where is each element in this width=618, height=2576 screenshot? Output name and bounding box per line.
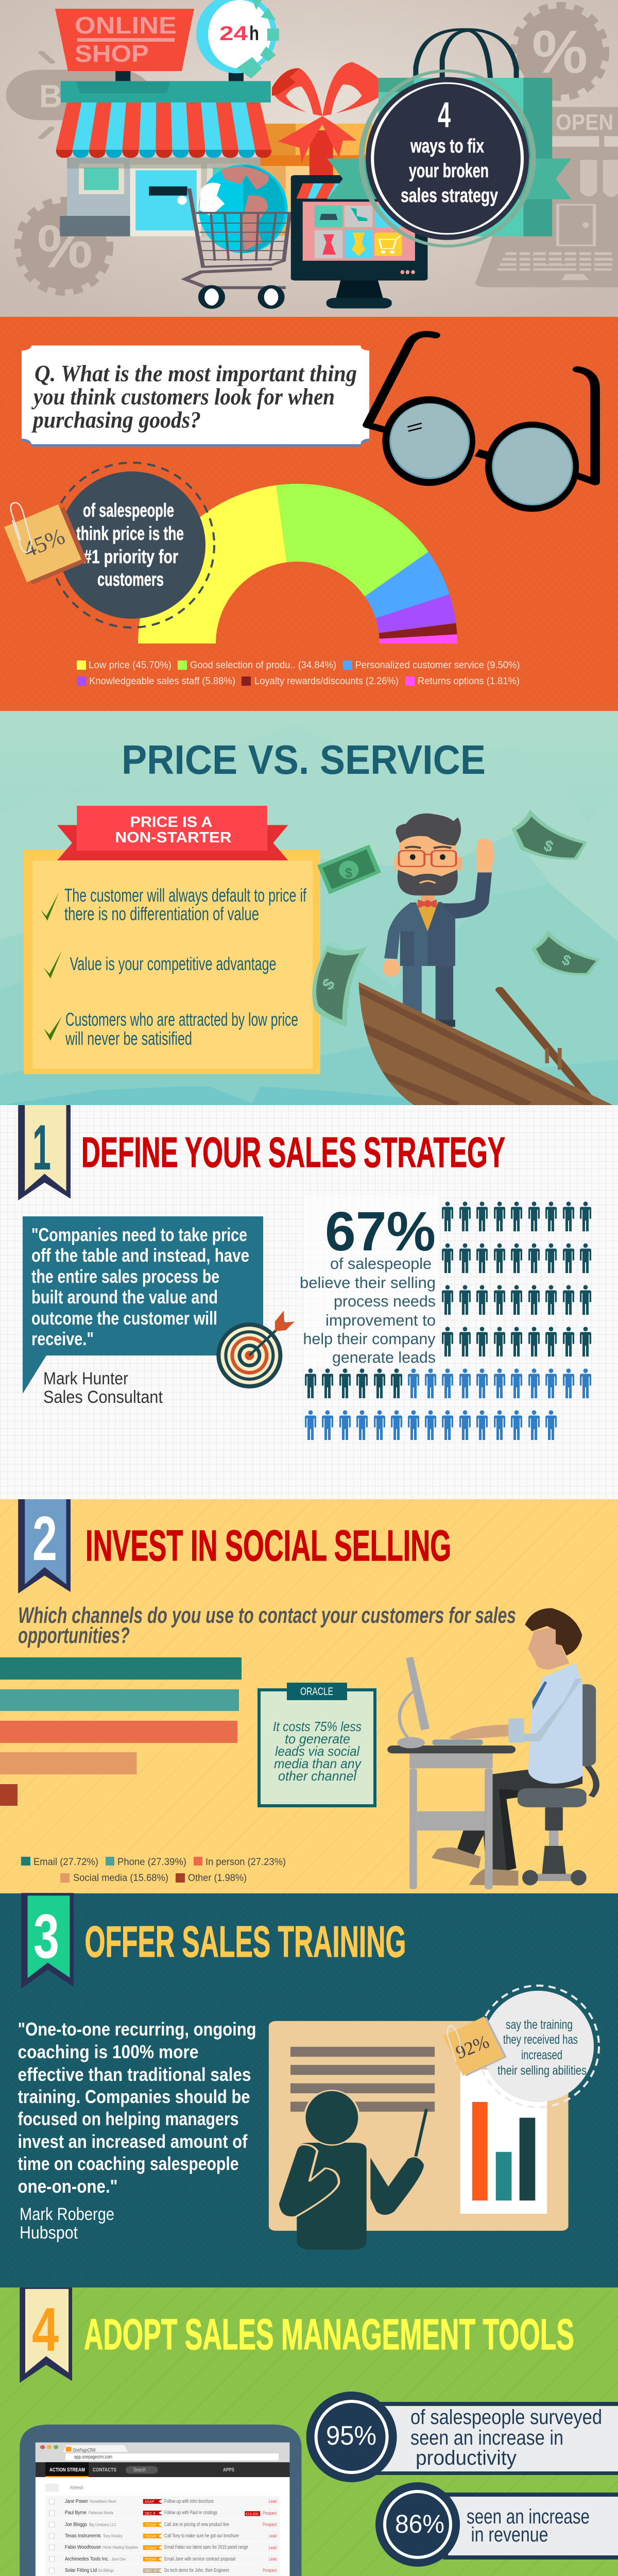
ribbon number 2: 2 [32,1503,57,1573]
stat: 86% revenue: in revenue [471,2523,548,2546]
illustration: trainer at board [269,2021,569,2250]
ghost background icons: % [37,213,93,281]
panel: survey question [0,317,618,711]
illustration: computer with CRM screenshot: Email Fabio our latest spec for 2015 panel range [164,2545,248,2550]
title badge: 4 [438,95,451,135]
panel: step 3 offer sales training [0,1893,618,2287]
illustration: computer with CRM screenshot: HomeWare Hevin [90,2499,116,2504]
icon: flying dollar bills: $ [560,951,573,969]
callout: oracle: media than any [274,1756,362,1771]
illustration: computer with CRM screenshot: ASAP [145,2500,154,2504]
stat circle: 92%: increased [521,2048,562,2062]
panel: price is a non-starter: PRICE IS A [130,814,213,831]
chart legend: Good selection of produ.. (34.84%) [190,660,336,671]
stat: 95% productivity: 95% [326,2421,376,2451]
illustration: computer with CRM screenshot: Prospect [263,2522,277,2527]
panel: price is a non-starter: will never be satisified [65,1028,192,1049]
panel: price is a non-starter: Customers who are attracted by low price [65,1009,298,1030]
bar chart: channels [0,1657,242,1806]
sign: online shop [55,9,194,71]
ribbon number 1: 1 [32,1112,51,1183]
stat: 67% of salespeople: improvement to [325,1311,436,1329]
quote bubble: the entire sales process be [31,1266,219,1287]
callout: oracle: ORACLE [300,1686,333,1698]
illustration: man at desk [387,1608,596,1889]
illustration: computer with CRM screenshot: TODAY [145,2558,157,2562]
ghost background icons: OPEN [556,110,613,135]
illustration: computer with CRM screenshot: OnePageCRM [73,2448,96,2453]
stat: 86% revenue [375,2482,618,2567]
stat: 67% of salespeople: help their company [303,1330,436,1348]
quote: coaching is 100% more [18,2041,199,2062]
icon: 24h clock sign [196,0,279,78]
illustration: computer with CRM screenshot: Fabio Woodhouse [65,2545,101,2550]
illustration: globe [199,164,288,253]
ribbon behind title badge [327,159,572,199]
sticky note: 45%: 45% [20,523,68,563]
illustration: computer with CRM screenshot: DEC 8 [145,2512,156,2516]
chart legend: Low price (45.70%) [89,660,171,671]
illustration: computer with CRM screenshot [20,2425,301,2576]
illustration: computer with CRM screenshot: Patterson Media [89,2511,113,2515]
quote attribution [43,1369,163,1407]
illustration: computer with CRM screenshot: Joe Bloggs [65,2522,87,2528]
stat circle: 92%: their selling abilities [497,2063,587,2078]
panel: step 1 define your sales strategy [0,1105,618,1499]
illustration: computer with CRM screenshot: Solar Fitting Ltd [65,2568,97,2573]
ribbon number 4: 4 [32,2295,59,2364]
quote attribution: Sales Consultant [43,1387,163,1407]
illustration: computer with CRM screenshot: Jane Doe [111,2557,126,2562]
stat circle: 45% of salespeople: customers [97,569,164,590]
stat: 95% productivity: productivity [416,2447,517,2469]
illustration: computer with CRM screenshot: Refresh [70,2485,83,2491]
stat: 67% of salespeople [300,1195,439,1366]
stat circle: 92%: they received has [503,2032,578,2047]
quote: effective than traditional sales [18,2064,251,2085]
icon: check marks [41,893,62,1041]
stat circle: 92%: say the training [506,2018,573,2032]
quote bubble: "Companies need to take price [31,1224,247,1245]
illustration: shopping cart [149,187,289,307]
chart legend: Other (1.98%) [188,1873,247,1884]
quote attribution [20,2205,114,2243]
quote: one-on-one." [18,2176,117,2197]
stat: 67% of salespeople: of salespeople [330,1255,432,1273]
chart legend: Returns options (1.81%) [418,676,520,687]
callout: oracle [259,1683,375,1806]
panel: hero [0,0,618,317]
illustration: computer with CRM screenshot: APPS [223,2467,234,2473]
chart legend: Knowledgeable sales staff (5.88%) [89,676,235,687]
icon: flying dollar bills: $ [345,865,353,880]
illustration: computer with CRM screenshot: Tony Kinsley [103,2534,123,2538]
stat circle: 92% [443,1986,599,2107]
illustration: computer with CRM screenshot: TODAY [145,2547,157,2550]
illustration: computer with CRM screenshot: Call Tony to make sure he got our brochure [164,2533,239,2539]
illustration: shopping bag [379,29,552,236]
panel: price is a non-starter: NON-STARTER [115,829,232,846]
illustration: computer with CRM screenshot: Paul Byrne [65,2510,87,2516]
illustration: storefront [56,65,271,236]
quote [18,2019,256,2197]
ribbon number 4 [20,2287,72,2383]
illustration: computer with CRM screenshot: Search [133,2467,146,2473]
icon: target with arrow [216,1311,295,1388]
stat: 95% productivity: seen an increase in [410,2427,563,2449]
sign: online shop: ONLINE [75,12,177,39]
stat circle: 45% of salespeople: think price is the [76,523,184,544]
question card: purchasing goods? [31,406,201,433]
illustration: computer with CRM screenshot: Lead [269,2545,277,2550]
ghost background icons [6,6,618,292]
quote attribution: Mark Hunter [43,1369,128,1388]
quote: time on coaching salespeople [18,2153,239,2174]
chart legend: Social media (15.68%) [73,1873,168,1884]
illustration: computer with CRM screenshot: €23,000 [246,2513,259,2516]
illustration: computer with CRM screenshot: Lead [269,2499,277,2504]
panel: price is a non-starter: Value is your competitive advantage [70,953,276,974]
quote: training. Companies should be [18,2086,250,2107]
quote bubble: outcome the customer will [31,1308,217,1329]
illustration: computer with CRM screenshot: Call Joe re pricing of new product line [164,2522,229,2528]
illustration: computer with CRM screenshot: Jane Power [65,2499,89,2504]
illustration: computer with CRM screenshot: ACTION STREAM [49,2467,85,2473]
illustration: computer with CRM screenshot: Follow up with intro brochure [164,2499,214,2504]
title badge: sales strategy [401,185,498,207]
heading: OFFER SALES TRAINING [84,1918,406,1967]
quote bubble: receive." [31,1328,94,1349]
title badge: ways to fix [410,135,484,157]
stat circle: 45% of salespeople: #1 priority for [83,546,178,567]
chart legend: In person (27.23%) [205,1857,286,1868]
icon: 24h clock sign: 24 [219,23,248,45]
sign: online shop: SHOP [75,40,149,67]
illustration: online store monitor [291,175,427,309]
illustration: computer with CRM screenshot: Archimedes Tools Inc. [65,2556,109,2562]
callout: oracle: other channel [278,1768,357,1784]
chart legend [77,660,520,687]
quote bubble: built around the value and [31,1286,218,1308]
question card: you think customers look for when [31,383,335,410]
ghost background icons: B [39,79,62,114]
quote attribution: Hubspot [20,2223,78,2243]
stat: 67% of salespeople: generate leads [332,1348,436,1366]
stat: 86% revenue: 86% [395,2510,444,2538]
chart legend: Phone (27.39%) [117,1857,186,1868]
quote: focused on helping managers [18,2108,239,2129]
sticky note: 45% [4,503,88,585]
heading: PRICE VS. SERVICE [122,737,486,783]
illustration: computer with CRM screenshot: TODAY [145,2535,157,2538]
question card: Q. What is the most important thing [35,360,357,386]
title badge [362,71,533,246]
illustration: computer with CRM screenshot: Follow up with Paul re costings [164,2510,217,2516]
illustration: computer with CRM screenshot: Email Jane with service contract proposal [164,2556,235,2562]
chart legend: Email (27.72%) [33,1857,98,1868]
icon: flying dollar bills: $ [318,975,338,993]
icon: flying dollar bills: $ [541,837,556,856]
callout: oracle: It costs 75% less [273,1719,362,1734]
illustration: computer with CRM screenshot: Big Company LLC [89,2522,116,2527]
ribbon number 3: 3 [33,1901,59,1971]
illustration: computer with CRM screenshot: TODAY [145,2523,157,2527]
title badge: your broken [409,160,489,182]
stat circle: 92%: 92% [453,2031,492,2063]
stat circle: 45% of salespeople: of salespeople [83,500,174,521]
question [18,1603,516,1648]
stat: 67% of salespeople: believe their selling [300,1274,436,1292]
illustration: computer with CRM screenshot: app.onepagecrm.com [74,2454,112,2460]
panel: step 4 adopt sales management tools [0,2287,618,2576]
ribbon number 1 [18,1105,71,1200]
illustration: computer with CRM screenshot: CONTACTS [93,2467,116,2473]
stat circle: 45% of salespeople [49,463,214,628]
callout: oracle: to generate [285,1731,350,1747]
icon: flying dollar bills [312,809,600,1027]
stat: 67% of salespeople: process needs [334,1292,436,1310]
quote bubble [23,1216,263,1394]
chart: half-donut of customer priorities [138,484,457,643]
icon: glasses [367,334,595,512]
stat: 95% productivity [306,2392,618,2482]
illustration: computer with CRM screenshot: Do tech demo for John, their Engineer [164,2568,229,2573]
stat: 67% of salespeople: 67% [325,1200,436,1262]
illustration: gift box and bow [260,62,387,235]
illustration: computer with CRM screenshot: DEC 10 [145,2569,158,2573]
quote: "One-to-one recurring, ongoing [18,2019,256,2040]
ribbon number 3 [21,1893,74,1989]
illustration: computer with CRM screenshot: Lead [269,2533,277,2538]
panel: price is a non-starter: The customer will always default to price if [64,885,307,906]
quote bubble: off the table and instead, have [31,1245,249,1266]
quote attribution: Mark Roberge [20,2205,114,2224]
illustration: computer with CRM screenshot: Prospect [263,2568,277,2573]
ribbon number 2 [18,1499,71,1594]
illustration: businessman on sinking boat [357,814,613,1105]
panel: price vs service [0,711,618,1105]
illustration: computer with CRM screenshot: Prospect [263,2511,277,2516]
ghost background icons: % [532,18,588,86]
question: opportunities? [18,1623,130,1648]
chart legend: Loyalty rewards/discounts (2.26%) [254,676,399,687]
quote: invest an increased amount of [18,2131,248,2152]
illustration: computer with CRM screenshot: Lead [269,2556,277,2562]
icon: 24h clock sign: h [249,23,259,45]
panel: price is a non-starter: there is no differentiation of value [64,903,259,924]
callout: oracle: leads via social [275,1743,360,1759]
illustration: computer with CRM screenshot: Ed Billings [98,2568,114,2573]
illustration: computer with CRM screenshot: Home Heating Supplies [102,2545,138,2550]
chart legend [21,1857,286,1884]
illustration: computer with CRM screenshot: Texas Instruments [65,2533,101,2539]
chart legend: Personalized customer service (9.50%) [355,660,520,671]
panel: step 2 invest in social selling [0,1499,618,1893]
question card [22,346,369,447]
icon array: people [305,1201,591,1440]
panel: price is a non-starter [24,806,320,1074]
